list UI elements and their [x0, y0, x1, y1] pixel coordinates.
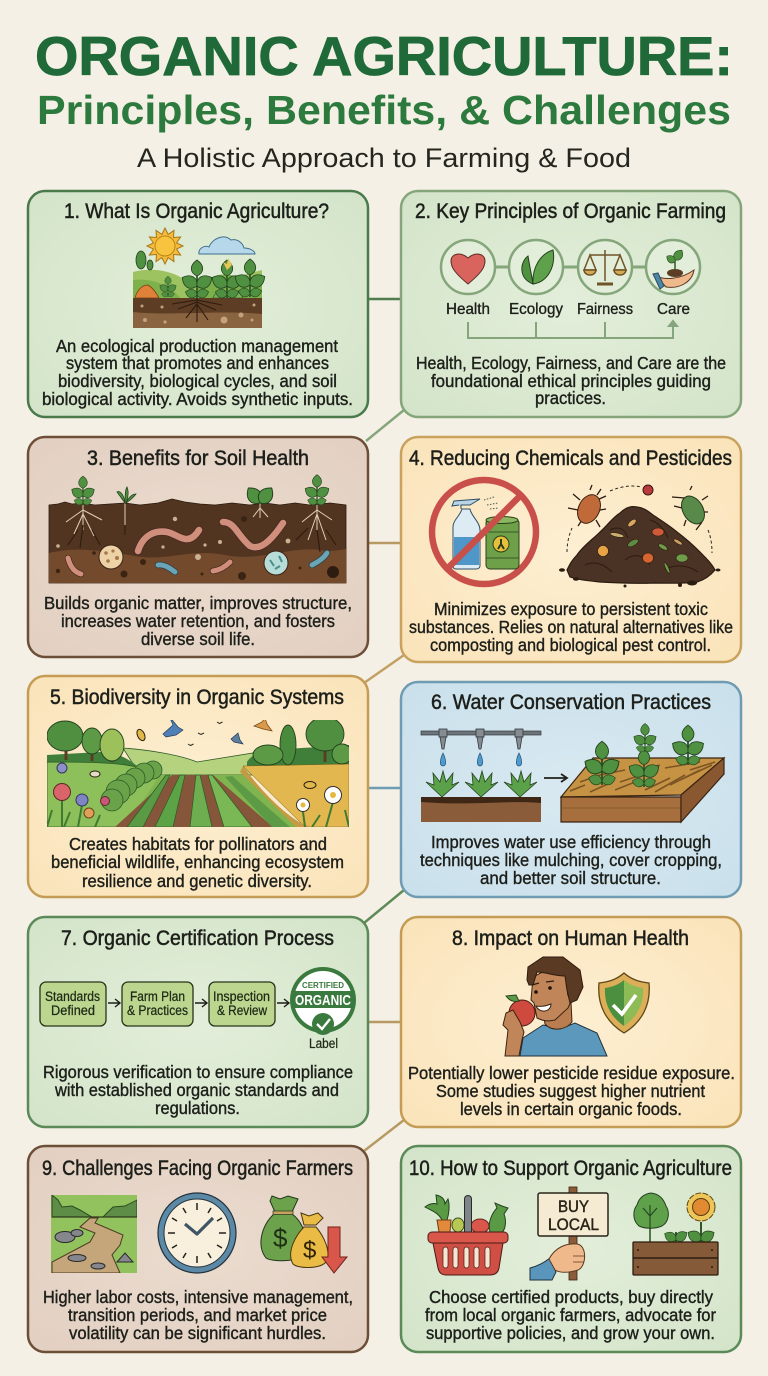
panel 4: reducing chemicals — [401, 437, 741, 662]
icon: garden planter — [633, 1193, 718, 1275]
panel 8: human health — [401, 917, 741, 1127]
subtitle: Principles, Benefits, & Challenges — [37, 87, 731, 133]
description: levels in certain organic foods. — [460, 1099, 682, 1119]
illustration: farm landscape with sun, cloud and soil — [133, 228, 268, 328]
description: Health, Ecology, Fairness, and Care are the — [416, 353, 726, 373]
panel 1: what is organic agriculture — [28, 191, 368, 417]
icon: orange beetle — [568, 485, 606, 527]
description — [44, 593, 352, 649]
description — [51, 834, 344, 891]
step: inspection — [209, 982, 275, 1026]
description — [43, 1287, 353, 1343]
illustration: drip irrigation — [421, 729, 541, 822]
badge caption: Label — [309, 1036, 338, 1051]
heading: 3. Benefits for Soil Health — [87, 447, 309, 470]
step: inspection: Inspection — [213, 989, 270, 1004]
heading: 1. What Is Organic Agriculture? — [64, 200, 329, 223]
process flow — [40, 967, 356, 1051]
illustration: mulched raised bed — [561, 724, 724, 822]
description — [409, 599, 733, 655]
description: Minimizes exposure to persistent toxic — [434, 599, 708, 619]
connector: 8 to 9 — [364, 1120, 404, 1151]
icon: vegetable basket — [425, 1195, 508, 1275]
principle labels — [446, 301, 690, 318]
icon: buy local sign: LOCAL — [548, 1215, 599, 1234]
description: from local organic farmers, advocate for — [425, 1305, 716, 1325]
description: beneficial wildlife, enhancing ecosystem — [51, 852, 344, 872]
connector: 3 to 4 — [368, 542, 401, 544]
icon: buy local sign — [530, 1187, 608, 1280]
panel 10: how to support — [401, 1146, 741, 1352]
bracket arrow — [468, 321, 677, 338]
principle labels: Care — [657, 301, 690, 318]
icon: scales — [584, 250, 626, 284]
birds and bees — [90, 716, 316, 788]
description: volatility can be significant hurdles. — [69, 1323, 326, 1343]
description: resilience and genetic diversity. — [82, 871, 312, 891]
icon: money bags with falling arrow — [261, 1196, 347, 1273]
description: Creates habitats for pollinators and — [69, 834, 327, 854]
icon: green beetle — [672, 486, 709, 530]
arrow — [277, 999, 289, 1007]
panel 7: certification process — [28, 917, 368, 1127]
description: diverse soil life. — [141, 629, 255, 649]
description: Builds organic matter, improves structure, — [44, 593, 352, 613]
icon: ladybug — [643, 485, 653, 495]
step: standards defined: Standards — [45, 989, 100, 1004]
step: farm plan: Farm Plan — [130, 989, 185, 1004]
description — [43, 1062, 353, 1118]
description: transition periods, and market price — [68, 1305, 327, 1325]
connector: 7 to 8 — [368, 1021, 401, 1023]
panel 3: soil health — [28, 437, 368, 657]
connector: 1 to 2 — [368, 298, 401, 300]
description: practices. — [535, 388, 606, 408]
description: An ecological production management — [56, 336, 338, 356]
description: composting and biological pest control. — [430, 635, 711, 655]
heading: 8. Impact on Human Health — [452, 927, 689, 950]
principle labels: Fairness — [577, 301, 633, 318]
icon: hand with seedling — [653, 248, 694, 289]
icon: leaf — [522, 250, 554, 284]
description — [408, 1063, 735, 1119]
icon: shield with check — [599, 973, 649, 1033]
description — [425, 1287, 716, 1343]
title block — [35, 25, 733, 173]
arrow — [195, 999, 207, 1007]
panel 5: biodiversity — [28, 676, 368, 897]
description: biodiversity, biological cycles, and soil — [58, 371, 337, 391]
heading: 6. Water Conservation Practices — [431, 691, 711, 714]
badge: certified organic: ORGANIC — [295, 992, 351, 1009]
description: Potentially lower pesticide residue exposure. — [408, 1063, 735, 1083]
illustration: soil cross-section — [49, 475, 346, 583]
description — [416, 353, 726, 408]
description: and better soil structure. — [480, 868, 661, 888]
description: techniques like mulching, cover cropping, — [420, 850, 722, 870]
heading: 9. Challenges Facing Organic Farmers — [42, 1157, 353, 1180]
description — [42, 336, 353, 409]
tagline: A Holistic Approach to Farming & Food — [137, 143, 631, 173]
principles diagram — [441, 240, 700, 294]
icon: rocky path landscape — [51, 1195, 137, 1273]
illustration: compost pile with insects — [559, 485, 720, 588]
badge: certified organic: CERTIFIED — [302, 981, 344, 990]
description: system that promotes and enhances — [66, 353, 329, 373]
arrow — [544, 774, 567, 782]
description: Rigorous verification to ensure compliance — [43, 1062, 353, 1082]
heading: 4. Reducing Chemicals and Pesticides — [409, 447, 732, 470]
description: foundational ethical principles guiding — [431, 371, 711, 391]
description: Choose certified products, buy directly — [429, 1287, 713, 1307]
panel 2: key principles — [401, 191, 741, 417]
description: regulations. — [155, 1098, 240, 1118]
description: biological activity. Avoids synthetic inputs. — [42, 389, 353, 409]
principle labels: Health — [446, 301, 490, 318]
trees — [47, 717, 352, 765]
illustration: person eating an apple — [503, 957, 607, 1056]
description: substances. Relies on natural alternatives like — [409, 617, 733, 637]
icon: money bags with falling arrow: $ — [273, 1223, 288, 1253]
panel 9: challenges — [28, 1146, 368, 1352]
description — [420, 832, 722, 888]
connector: 2 to 3 — [366, 410, 404, 441]
description: Improves water use efficiency through — [431, 832, 711, 852]
heading: 7. Organic Certification Process — [61, 927, 334, 950]
step: standards defined — [40, 982, 106, 1026]
step: farm plan: & Practices — [127, 1003, 188, 1018]
step: inspection: & Review — [217, 1003, 267, 1018]
illustration: farm landscape — [47, 716, 352, 827]
description: supportive policies, and grow your own. — [426, 1323, 715, 1343]
step: farm plan — [122, 982, 193, 1026]
heading: 10. How to Support Organic Agriculture — [409, 1157, 732, 1180]
description: increases water retention, and fosters — [61, 611, 335, 631]
flowers — [47, 763, 349, 827]
connector: 4 to 5 — [364, 655, 404, 683]
icon: buy local sign: BUY — [558, 1197, 589, 1216]
icon: clock — [158, 1193, 236, 1273]
description: Higher labor costs, intensive management, — [43, 1287, 353, 1307]
heading: 2. Key Principles of Organic Farming — [415, 200, 726, 223]
panel 6: water conservation — [401, 682, 741, 897]
icon: money bags with falling arrow: $ — [303, 1237, 316, 1264]
connector: 6 to 7 — [364, 890, 404, 923]
heading: 5. Biodiversity in Organic Systems — [50, 686, 344, 709]
arrow — [108, 999, 120, 1007]
principle labels: Ecology — [509, 301, 563, 318]
step: standards defined: Defined — [51, 1003, 95, 1018]
icon: heart — [451, 254, 485, 284]
description: with established organic standards and — [54, 1080, 339, 1100]
main title: ORGANIC AGRICULTURE: — [35, 25, 733, 87]
illustration: prohibited spray and barrel — [432, 480, 536, 584]
connector: 5 to 6 — [368, 787, 401, 789]
description: Some studies suggest higher nutrient — [436, 1081, 705, 1101]
badge: certified organic — [290, 967, 356, 1035]
